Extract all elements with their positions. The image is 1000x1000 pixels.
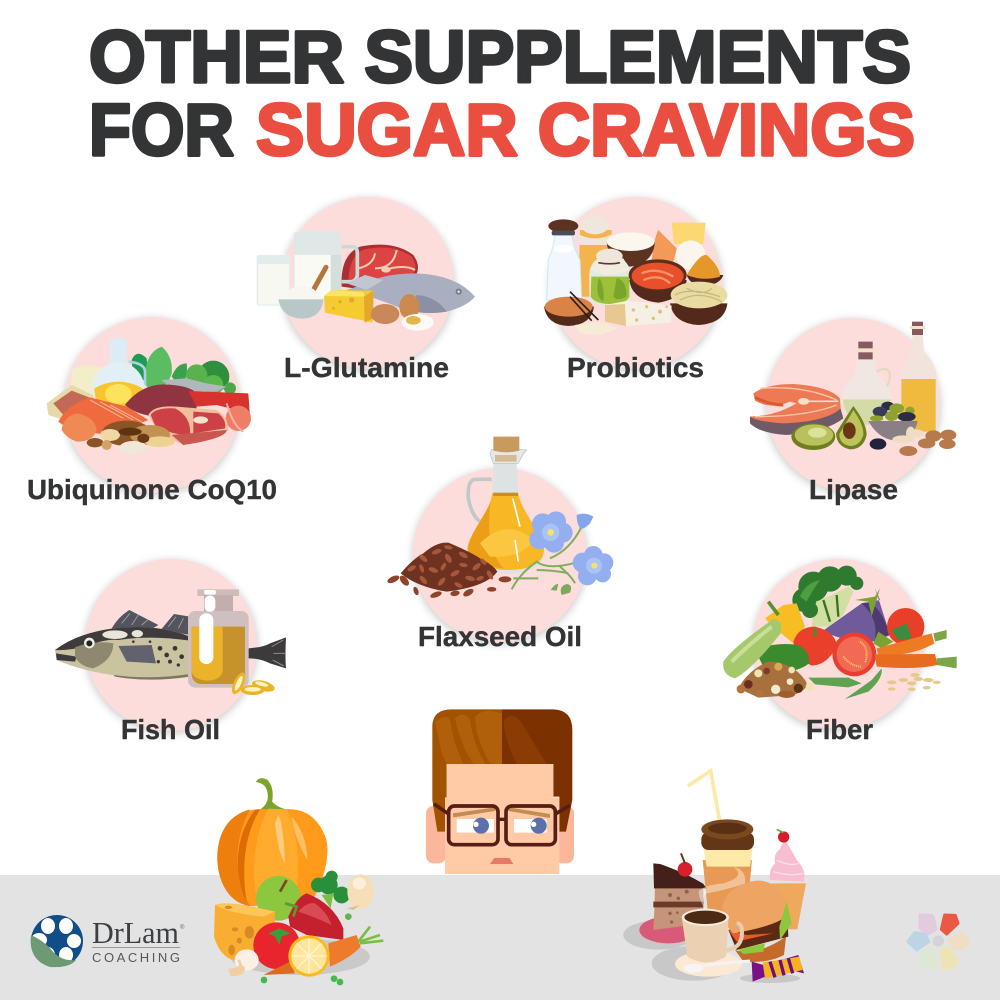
panel: Probiotics	[544, 197, 727, 383]
icon: dairy, meat, fish and eggs	[257, 230, 475, 331]
logo: DrLam Coaching: ®	[180, 924, 185, 931]
icon: fat foods	[750, 322, 956, 456]
panel: Lipase	[750, 318, 956, 505]
title: OTHER SUPPLEMENTS	[89, 17, 911, 98]
icon: CoQ10 foods	[47, 337, 251, 454]
label: Fish Oil	[121, 714, 220, 745]
panel: Fish Oil	[55, 559, 286, 745]
panel: L-Glutamine	[257, 197, 475, 383]
label: Lipase	[809, 474, 898, 505]
logo: DrLam Coaching	[31, 915, 185, 967]
logo mark	[31, 915, 83, 967]
icon: fish and oil bottle	[55, 589, 286, 696]
icon: fermented foods	[544, 216, 727, 335]
character: head with glasses	[426, 709, 574, 874]
label: L-Glutamine	[284, 352, 449, 383]
panel: Fiber	[723, 559, 957, 745]
icon: flower watermark	[908, 915, 969, 968]
illustration: healthy foods	[214, 779, 383, 985]
wordmark: DrLam	[92, 915, 179, 950]
illustration: junk foods	[623, 771, 806, 983]
label: Probiotics	[567, 352, 704, 383]
label: Fiber	[806, 714, 873, 745]
title: SUGAR CRAVINGS	[256, 90, 915, 171]
panel: Flaxseed Oil	[386, 437, 613, 652]
logo: DrLam Coaching: COACHING	[92, 950, 180, 965]
title: FOR	[89, 90, 234, 171]
title	[89, 17, 915, 171]
label: Flaxseed Oil	[418, 621, 582, 652]
label: Ubiquinone CoQ10	[27, 474, 277, 505]
table band	[0, 875, 1000, 1000]
icon: flaxseed oil bottle and flowers	[386, 437, 613, 599]
panel: Ubiquinone CoQ10	[27, 317, 277, 505]
icon: vegetables	[723, 566, 957, 699]
